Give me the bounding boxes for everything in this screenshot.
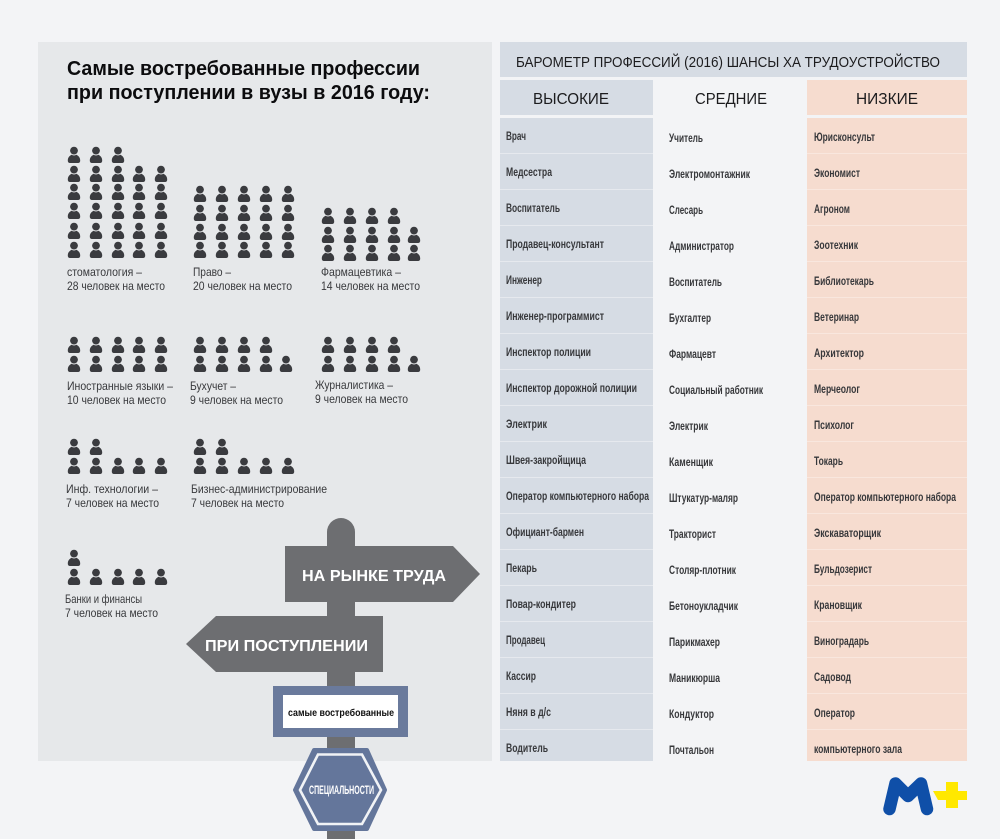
column rows: низкие: Бульдозерист [814, 564, 872, 576]
panel: most demanded professions [38, 42, 492, 761]
column rows: средние: Почтальон [669, 745, 714, 757]
column rows: низкие: Библиотекарь [814, 276, 874, 288]
label: фармацевтика [321, 265, 420, 293]
title: при поступлении в вузы в 2016 году: [67, 82, 430, 104]
column rows: низкие: Психолог [814, 420, 854, 432]
column rows: средние: Каменщик [669, 457, 713, 469]
column rows: высокие [500, 118, 653, 761]
logo: M+ [890, 782, 967, 809]
column rows: высокие: Электрик [506, 419, 547, 431]
column rows: средние: Социальный работник [669, 385, 763, 397]
pictogram: банки и финансы [68, 550, 167, 585]
column: высокие [500, 80, 653, 761]
column rows: средние: Бетоноукладчик [669, 601, 738, 613]
arrow: при поступлении: ПРИ ПОСТУПЛЕНИИ [205, 638, 368, 655]
signpost pole [327, 518, 355, 839]
label: иностранные языки [67, 379, 173, 407]
column rows: низкие: Ветеринар [814, 312, 859, 324]
column rows: высокие: Пекарь [506, 563, 537, 575]
label: инф. технологии: 7 человек на место [66, 496, 159, 510]
label: банки и финансы [65, 592, 158, 620]
column rows: низкие: Токарь [814, 456, 843, 468]
column rows: высокие: Инженер [506, 275, 542, 287]
pictogram: иностранные языки [68, 337, 167, 372]
column rows: низкие: Оператор компьютерного набора [814, 492, 956, 504]
label: бизнес-администрирование [191, 482, 327, 510]
label: банки и финансы: Банки и финансы [65, 592, 142, 606]
column rows: низкие: Мерчеолог [814, 384, 860, 396]
label: банки и финансы: 7 человек на место [65, 606, 158, 620]
hexagon: специальности: СПЕЦИАЛЬНОСТИ [309, 785, 374, 797]
label: инф. технологии [66, 482, 159, 510]
column rows: высокие: Продавец [506, 635, 545, 647]
column rows: средние: Столяр-плотник [669, 565, 736, 577]
pictogram: право [194, 186, 294, 258]
column rows: средние: Электрик [669, 421, 708, 433]
column heading: низкие [807, 80, 967, 115]
title: Самые востребованные профессии [67, 58, 420, 80]
column rows: средние: Электромонтажник [669, 169, 750, 181]
hexagon: специальности [295, 750, 385, 829]
label: журналистика: Журналистика – [315, 378, 393, 392]
column rows: средние: Маникюрша [669, 673, 720, 685]
column rows: низкие: Виноградарь [814, 636, 869, 648]
column: низкие [807, 80, 967, 761]
label: иностранные языки: 10 человек на место [67, 393, 166, 407]
arrow: на рынке труда: НА РЫНКЕ ТРУДА [302, 568, 446, 585]
column heading: низкие: НИЗКИЕ [856, 91, 918, 108]
column rows: высокие: Оператор компьютерного набора [506, 491, 649, 503]
column rows: средние: Тракторист [669, 529, 716, 541]
column rows: высокие: Продавец-консультант [506, 239, 604, 251]
label: иностранные языки: Иностранные языки – [67, 379, 173, 393]
column rows: средние: Учитель [669, 133, 703, 145]
column rows: высокие: Кассир [506, 671, 536, 683]
column rows: средние: Штукатур-маляр [669, 493, 738, 505]
label: право: 20 человек на место [193, 279, 292, 293]
arrow: при поступлении [186, 616, 383, 672]
pictogram: бизнес-администрирование [194, 439, 294, 474]
label: журналистика: 9 человек на место [315, 392, 408, 406]
column rows: средние [669, 133, 763, 757]
label: стоматология: 28 человек на место [67, 279, 165, 293]
label: бухучет: Бухучет – [190, 379, 236, 393]
column rows: высокие: Инженер-программист [506, 311, 604, 323]
column rows: средние: Воспитатель [669, 277, 722, 289]
column rows: высокие: Няня в д/с [506, 707, 551, 719]
column rows: средние: Кондуктор [669, 709, 714, 721]
plate: самые востребованные: самые востребованные [288, 707, 394, 719]
column rows: низкие: Крановщик [814, 600, 862, 612]
pictogram: журналистика [322, 337, 420, 372]
column rows: низкие: Архитектор [814, 348, 864, 360]
label: бизнес-администрирование: 7 человек на место [191, 496, 284, 510]
pictogram: бухучет [194, 337, 292, 372]
label: бухучет: 9 человек на место [190, 393, 283, 407]
label: фармацевтика: Фармацевтика – [321, 265, 401, 279]
label: бизнес-администрирование: Бизнес-администрирование [191, 482, 327, 496]
column rows: высокие: Врач [506, 131, 526, 143]
column rows: высокие: Официант-бармен [506, 527, 584, 539]
column rows: низкие: компьютерного зала [814, 744, 902, 756]
column rows: низкие [807, 118, 967, 761]
column rows: средние: Слесарь [669, 205, 703, 217]
column rows: низкие: Агроном [814, 204, 850, 216]
column rows: высокие: Медсестра [506, 167, 552, 179]
barometer header: БАРОМЕТР ПРОФЕССИЙ (2016) ШАНСЫ ХА ТРУДОУСТРОЙСТВО [516, 53, 940, 71]
column rows: высокие: Водитель [506, 743, 548, 755]
pictogram: фармацевтика [322, 208, 420, 261]
column rows: низкие: Зоотехник [814, 240, 858, 252]
column rows: низкие: Экономист [814, 168, 860, 180]
label: стоматология: стоматология – [67, 265, 142, 279]
column heading: высокие [500, 80, 653, 115]
column rows: низкие: Экскаваторщик [814, 528, 881, 540]
column rows: высокие: Инспектор дорожной полиции [506, 383, 637, 395]
barometer header [500, 42, 967, 77]
label: бухучет [190, 379, 283, 407]
label: инф. технологии: Инф. технологии – [66, 482, 158, 496]
label: фармацевтика: 14 человек на место [321, 279, 420, 293]
pictogram: стоматология [68, 147, 167, 258]
column: средние [669, 91, 767, 757]
column rows: средние: Бухгалтер [669, 313, 711, 325]
column rows: высокие: Повар-кондитер [506, 599, 576, 611]
column rows: низкие: Оператор [814, 708, 855, 720]
title [67, 58, 430, 104]
column heading: высокие: ВЫСОКИЕ [533, 91, 609, 108]
column rows: высокие: Инспектор полиции [506, 347, 591, 359]
column heading: средние: СРЕДНИЕ [695, 91, 767, 108]
plate: самые востребованные [273, 686, 408, 737]
label: право: Право – [193, 265, 231, 279]
pictogram: инф. технологии [68, 439, 167, 474]
arrow: на рынке труда [285, 546, 480, 602]
label: журналистика [315, 378, 408, 406]
column rows: средние: Администратор [669, 241, 734, 253]
column rows: низкие: Садовод [814, 672, 852, 684]
column rows: средние: Парикмахер [669, 637, 720, 649]
column rows: средние: Фармацевт [669, 349, 716, 361]
column rows: низкие: Юрисконсульт [814, 132, 875, 144]
label: право [193, 265, 292, 293]
column rows: высокие: Воспитатель [506, 203, 560, 215]
label: стоматология [67, 265, 165, 293]
signpost [186, 518, 480, 839]
column rows: высокие: Швея-закройщица [506, 455, 586, 467]
